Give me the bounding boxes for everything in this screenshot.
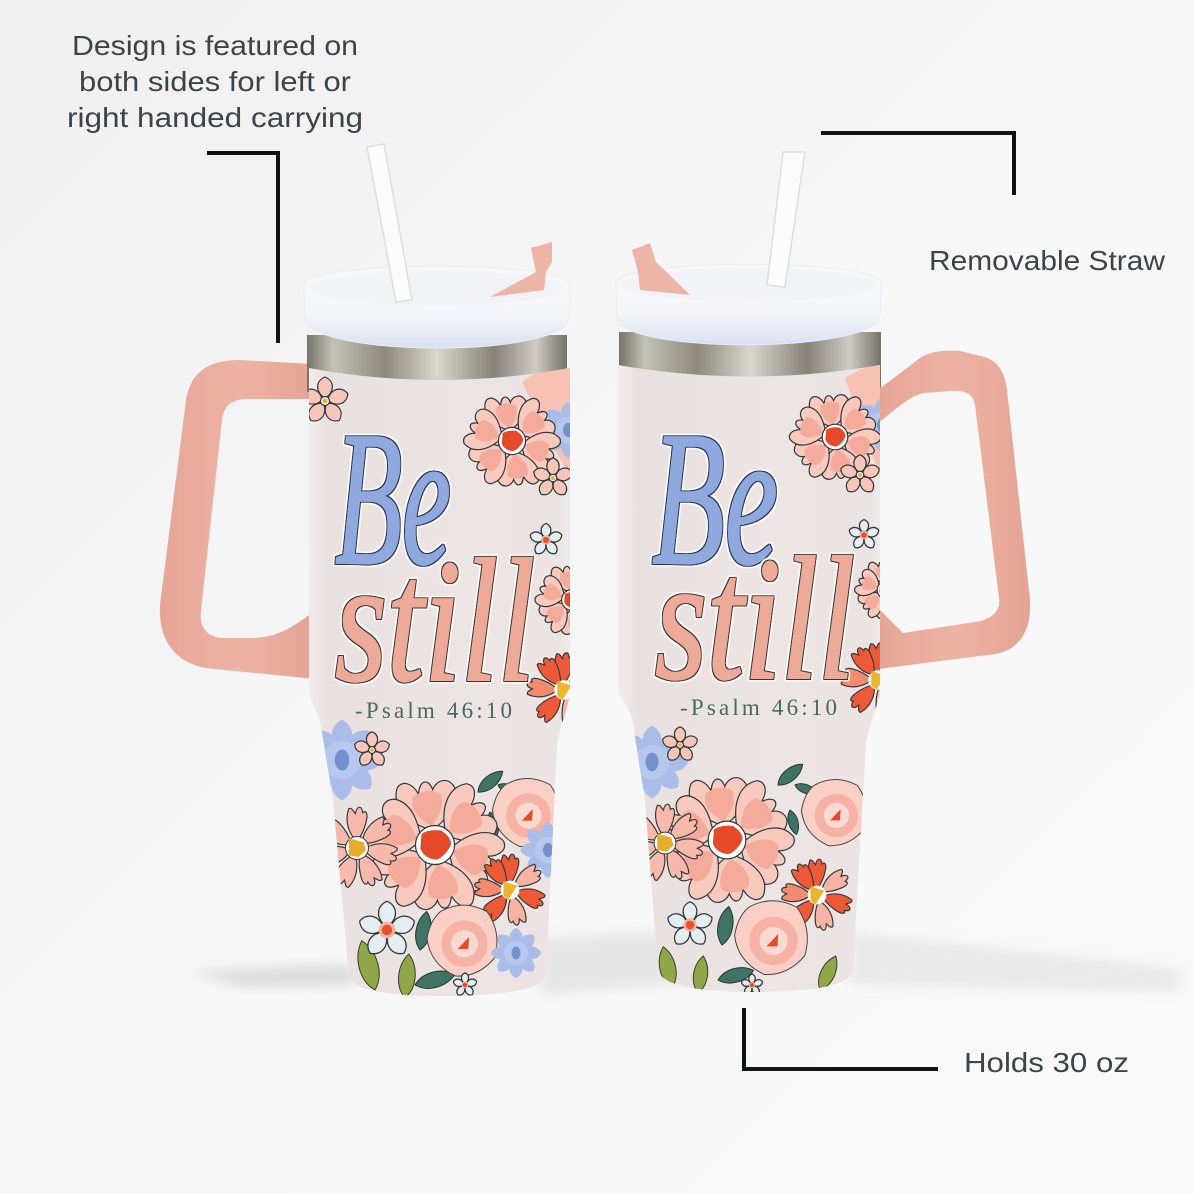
callout line: straw: [821, 133, 1014, 195]
left reference: Psalm: -Psalm 46:10: [355, 698, 512, 723]
callout: design on both sides: [67, 30, 363, 133]
right flower cluster bottom: [634, 726, 863, 992]
right lid: [616, 264, 881, 345]
callout: removable straw: Removable Straw: [929, 245, 1166, 276]
left lid: [304, 266, 570, 348]
right lettering: still: still: [655, 522, 855, 717]
left lettering: Be: Be: [335, 392, 451, 605]
right handle: [878, 351, 1030, 669]
callout: capacity: Holds 30 oz: [964, 1047, 1129, 1078]
left body: [309, 368, 570, 996]
left steel band: [307, 335, 567, 392]
right reference: Psalm: -Psalm 46:10: [680, 695, 837, 720]
right flower cluster top: [788, 365, 880, 713]
left flower cluster top: [309, 368, 570, 723]
right tumbler: [610, 152, 1030, 1005]
right straw: [767, 152, 805, 287]
left tumbler: [160, 144, 611, 1005]
left lid spout: [490, 242, 552, 297]
floor shadows: [190, 930, 1180, 995]
callout line: design: [207, 153, 278, 343]
right body: [618, 365, 880, 992]
callout: design on both sides: both sides for left or: [79, 66, 351, 97]
left lettering: still: still: [335, 524, 535, 719]
callout: design on both sides: right handed carrying: [67, 102, 363, 133]
callout line: capacity: [744, 1008, 938, 1069]
right lettering: Be: Be: [652, 392, 778, 605]
left straw: [367, 144, 412, 302]
left flower cluster bottom: [322, 720, 555, 996]
right lid spout: [632, 243, 690, 295]
callout: design on both sides: Design is featured on: [72, 30, 358, 61]
left handle: [160, 360, 316, 679]
right steel band: [619, 332, 881, 388]
